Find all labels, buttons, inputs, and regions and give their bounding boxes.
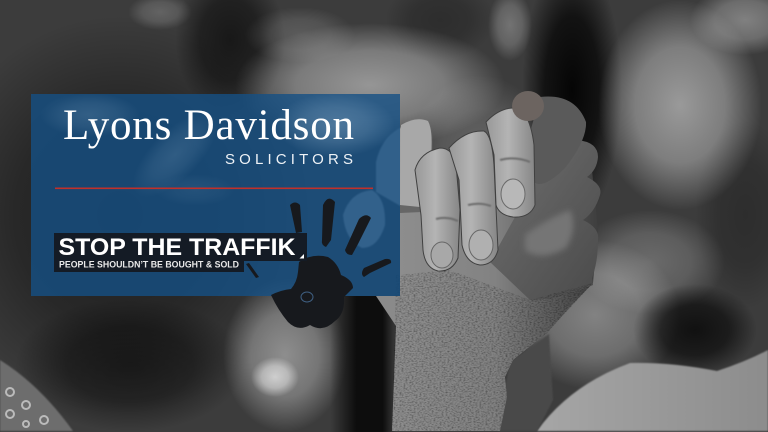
middle finger [449, 131, 498, 265]
light wedge beside the wrist [376, 296, 400, 326]
knuckles and right-hand fingers [490, 140, 600, 300]
middle finger [345, 215, 371, 255]
red divider [55, 188, 373, 189]
wrist and back of hand [392, 130, 598, 431]
index finger [362, 259, 391, 277]
patterned garment at lower left [0, 360, 73, 431]
corner mark [300, 254, 304, 258]
finger creases [436, 158, 530, 221]
back-hand blob behind panel [343, 190, 385, 248]
back-hand finger behind panel [376, 120, 431, 208]
ring finger [322, 199, 335, 247]
sweater at lower right [537, 350, 768, 431]
thumb [246, 263, 259, 278]
finger nails [431, 242, 453, 268]
campaign tagline: PEOPLE SHOULDN’T BE BOUGHT & SOLD [59, 260, 239, 270]
clasped hands photograph [343, 91, 600, 431]
palm detail [301, 292, 313, 302]
label backgrounds [54, 233, 307, 272]
back thumb [525, 97, 586, 184]
campaign name: STOP THE TRAFFIK [58, 234, 296, 261]
logo: Solicitors: SOLICITORS [225, 151, 353, 168]
thumb tip [512, 91, 544, 121]
handprint logo [246, 199, 391, 328]
back hand index [400, 119, 432, 208]
logo: Lyons Davidson: Lyons Davidson [63, 102, 354, 149]
left finger [415, 148, 460, 271]
third finger [486, 108, 535, 217]
campaign lockup: Stop the Traffik [54, 233, 307, 272]
panel light reflections [52, 98, 386, 196]
palm [271, 256, 353, 328]
little finger [290, 202, 302, 233]
blue branded panel [31, 93, 400, 296]
skin texture [392, 270, 593, 431]
arm behind the wrist [497, 334, 553, 431]
